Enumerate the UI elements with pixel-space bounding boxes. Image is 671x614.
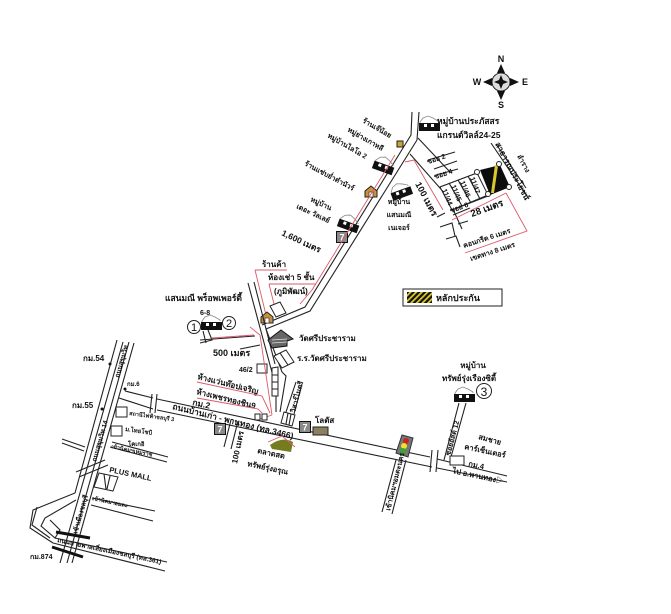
- temple: วัดศรีประชาราม: วัดศรีประชาราม: [299, 333, 356, 343]
- shop: ร้านเจ๊น้อย labels: ร้านเจ๊น้อย: [361, 116, 393, 140]
- shop: ร้านเจ๊น้อย labels: หมู่ย่างเกาหลี: [346, 126, 385, 154]
- side road: กม.6: กม.6: [127, 381, 140, 388]
- school: ร.ร.วัดศรีประชาราม: [274, 350, 367, 368]
- shop: ห้างแว่นท๊อปเจริญ: [196, 371, 270, 413]
- railway cross: [76, 460, 108, 477]
- car center: [450, 432, 508, 486]
- 7-eleven and Lotus: โลตัส: [314, 415, 334, 425]
- village: ประภัสสร: หมู่บ้านประภัสสร: [437, 116, 500, 127]
- measurement: 100 เมตร (lower): 100 เมตร: [230, 430, 246, 464]
- soi labels: ซอย 4: [433, 168, 454, 181]
- village 3: ทรัพย์รุ่งเรืองซิตี้: ทรัพย์รุ่งเรืองซิตี้: [442, 372, 497, 384]
- main road: [119, 391, 507, 482]
- traffic light: [396, 435, 413, 457]
- side road west: [62, 439, 168, 462]
- label: ลำราง: ลำราง: [515, 153, 532, 175]
- shop: ร้านแซ่บย่ำตำนัวร์: ร้านแซ่บย่ำตำนัวร์: [303, 158, 357, 193]
- village: เดอะ วัลเลย์: หมู่บ้าน: [309, 195, 333, 213]
- car center: สมชาย: [477, 432, 502, 447]
- collateral plots: 11/46: [458, 180, 471, 199]
- temple: วัดศรีประชาราม: [268, 330, 356, 348]
- collateral plots: [440, 162, 512, 210]
- shop: ร้านเจ๊น้อย labels: [346, 116, 403, 154]
- rental: ห้องเช่า 5 ชั้น: [268, 271, 316, 317]
- highway 361: กม.874: [30, 554, 53, 561]
- legend: [403, 289, 502, 306]
- village: เดอะ วัลเลย์: เดอะ วัลเลย์: [295, 202, 331, 225]
- measurement: 500 เมตร: 500 เมตร: [213, 348, 250, 358]
- village: แสนมณี เนเจอร์: แสนมณี: [387, 211, 412, 219]
- road surface labels: คอนกรีต 6 เมตร: [462, 227, 512, 250]
- side road: กม.6: [124, 381, 140, 390]
- measurement: 100 เมตร (lower): [224, 420, 246, 464]
- measurements: 28 เมตร: [452, 193, 527, 253]
- property: แสนมณี พร็อพเพอร์ตี้: [165, 291, 243, 334]
- soi to property: [200, 330, 212, 343]
- soi 17 road: ซอยอีสต์ 12: [443, 419, 461, 457]
- property: แสนมณี พร็อพเพอร์ตี้: 6-8: [200, 310, 210, 317]
- village 3: ทรัพย์รุ่งเรืองซิตี้: หมู่บ้าน: [460, 360, 486, 371]
- side road south: [91, 494, 155, 521]
- rental: ห้องเช่า 5 ชั้น: (ภูมิพัฒน์): [274, 286, 308, 297]
- highway labels: กม.55: [72, 401, 94, 410]
- soi labels: ซอย 2: [426, 153, 447, 166]
- PLUS MALL: PLUS MALL: [109, 465, 153, 483]
- stations: สถานีไฟฟ้าชลบุรี 3: [129, 409, 175, 423]
- highway labels: เข้าเมืองชลบุรี: [70, 493, 90, 535]
- car center: กม.4: [468, 459, 486, 471]
- highway: [30, 340, 134, 563]
- road south of traffic light: เข้านิคมฯอมตะนคร: [383, 451, 406, 511]
- school: ร.ร.วัดศรีประชาราม: ร.ร.วัดศรีประชาราม: [297, 353, 367, 363]
- measurement: 100 เมตร (upper): [405, 160, 443, 218]
- house 46/2: 46/2: [239, 367, 253, 374]
- village: แสนมณี เนเจอร์: เนเจอร์: [388, 223, 410, 232]
- market: ตลาดสด ทรัพย์รุ่งอรุณ: [247, 436, 295, 477]
- road label: สาธารณประโยชน์: สาธารณประโยชน์: [493, 140, 532, 202]
- legend: หลักประกัน: [436, 293, 481, 303]
- house 46/2: [239, 364, 267, 374]
- shop: ร้านแซ่บย่ำตำนัวร์: [303, 158, 377, 197]
- compass: N: [498, 54, 504, 64]
- village: ไลโอ 2: หมู่บ้านไลโอ 2: [326, 131, 369, 162]
- 7-eleven and Lotus: [300, 415, 334, 435]
- road surface labels: [462, 227, 516, 263]
- compass: [473, 54, 528, 110]
- shop: ห้างเพชรทองชิน9: [196, 386, 267, 420]
- stations: ม.ไทยโชบิ: [125, 425, 153, 437]
- soi labels: [426, 153, 470, 215]
- highway 361: ถนนบายพาสเลี่ยงเมืองชลบุรี (ทล.361): [57, 534, 162, 566]
- highway labels: ถนนสุขุมวิท 14: [90, 419, 110, 463]
- road label: กม.2: กม.2: [192, 397, 211, 411]
- shop: ห้างแว่นท๊อปเจริญ: ห้างแว่นท๊อปเจริญ: [196, 371, 260, 397]
- compass: E: [522, 77, 528, 87]
- village: ไลโอ 2: [326, 131, 397, 175]
- red route to property: [250, 327, 272, 420]
- shop: ห้างเพชรทองชิน9: ห้างเพชรทองชิน9: [196, 386, 257, 411]
- road surface labels: เขตทาง 8 เมตร: [469, 242, 516, 263]
- shop row beside road: [272, 367, 278, 396]
- 7-eleven west: [214, 424, 226, 434]
- measurement: 100 เมตร (upper): 100 เมตร: [413, 180, 440, 218]
- car center: ไป อ.พานทอง▷: [451, 465, 505, 486]
- shop: ร้านค้า: ร้านค้า: [262, 259, 286, 269]
- side road south: เข้านิคมฯอมตะ: [92, 494, 129, 510]
- vertical road: [200, 282, 286, 412]
- collateral plots: 11/44: [440, 188, 453, 207]
- village: แสนมณี เนเจอร์: หมู่บ้าน: [388, 197, 410, 207]
- property: แสนมณี พร็อพเพอร์ตี้: แสนมณี พร็อพเพอร์ตี้: [165, 291, 243, 303]
- village: แสนมณี เนเจอร์: [387, 180, 413, 232]
- side road west: เข้านิคมฯเหมราช: [111, 442, 153, 459]
- property: แสนมณี พร็อพเพอร์ตี้: 1: [191, 322, 197, 334]
- rental: ห้องเช่า 5 ชั้น: ห้องเช่า 5 ชั้น: [268, 271, 315, 282]
- building corner: [281, 412, 295, 426]
- collateral plots: 11/47: [468, 176, 481, 195]
- village: เดอะ วัลเลย์: [295, 195, 362, 242]
- property: แสนมณี พร็อพเพอร์ตี้: 2: [226, 318, 232, 330]
- village: ประภัสสร: [419, 116, 501, 140]
- highway 361: [30, 532, 167, 571]
- main diagonal road: [262, 112, 419, 329]
- stations: [111, 407, 175, 448]
- soi 17 road: [443, 403, 466, 460]
- road: วิสาร์ไมตรี: วิสาร์ไมตรี: [288, 380, 305, 415]
- soi labels: ซอย 6: [449, 202, 470, 215]
- village 3: ทรัพย์รุ่งเรืองซิตี้: 3: [481, 385, 488, 399]
- measurement: 500 เมตร: [212, 335, 254, 358]
- market: ตลาดสด ทรัพย์รุ่งอรุณ: ทรัพย์รุ่งอรุณ: [247, 459, 289, 477]
- shop: ร้านค้า: [255, 259, 287, 323]
- village: ประภัสสร: แกรนด์วิลล์24-25: [437, 130, 501, 140]
- stations: โคเกอิ: [127, 440, 145, 448]
- highway labels: กม.54: [83, 354, 105, 363]
- village side roads: [410, 138, 529, 247]
- measurement: 1,600 เมตร: 1,600 เมตร: [280, 228, 323, 255]
- PLUS MALL: [94, 465, 153, 491]
- measurement: 1,600 เมตร: [280, 155, 395, 304]
- compass: S: [498, 100, 504, 110]
- village 3: ทรัพย์รุ่งเรืองซิตี้: [442, 360, 497, 402]
- highway labels: ถนนสุขุมวิท: [113, 344, 130, 379]
- highway labels: [70, 344, 130, 535]
- road label: ถนนบ้านเก่า - พานทอง: ถนนบ้านเก่า - พานทอง (ทล.3466): [172, 401, 295, 441]
- collateral plots: 11/45: [449, 184, 462, 203]
- measurements: 28 เมตร: 28 เมตร: [469, 198, 506, 220]
- car center: คาร์เซ็นเตอร์: [464, 441, 508, 460]
- market: ตลาดสด ทรัพย์รุ่งอรุณ: ตลาดสด: [257, 446, 286, 461]
- compass: W: [473, 77, 482, 87]
